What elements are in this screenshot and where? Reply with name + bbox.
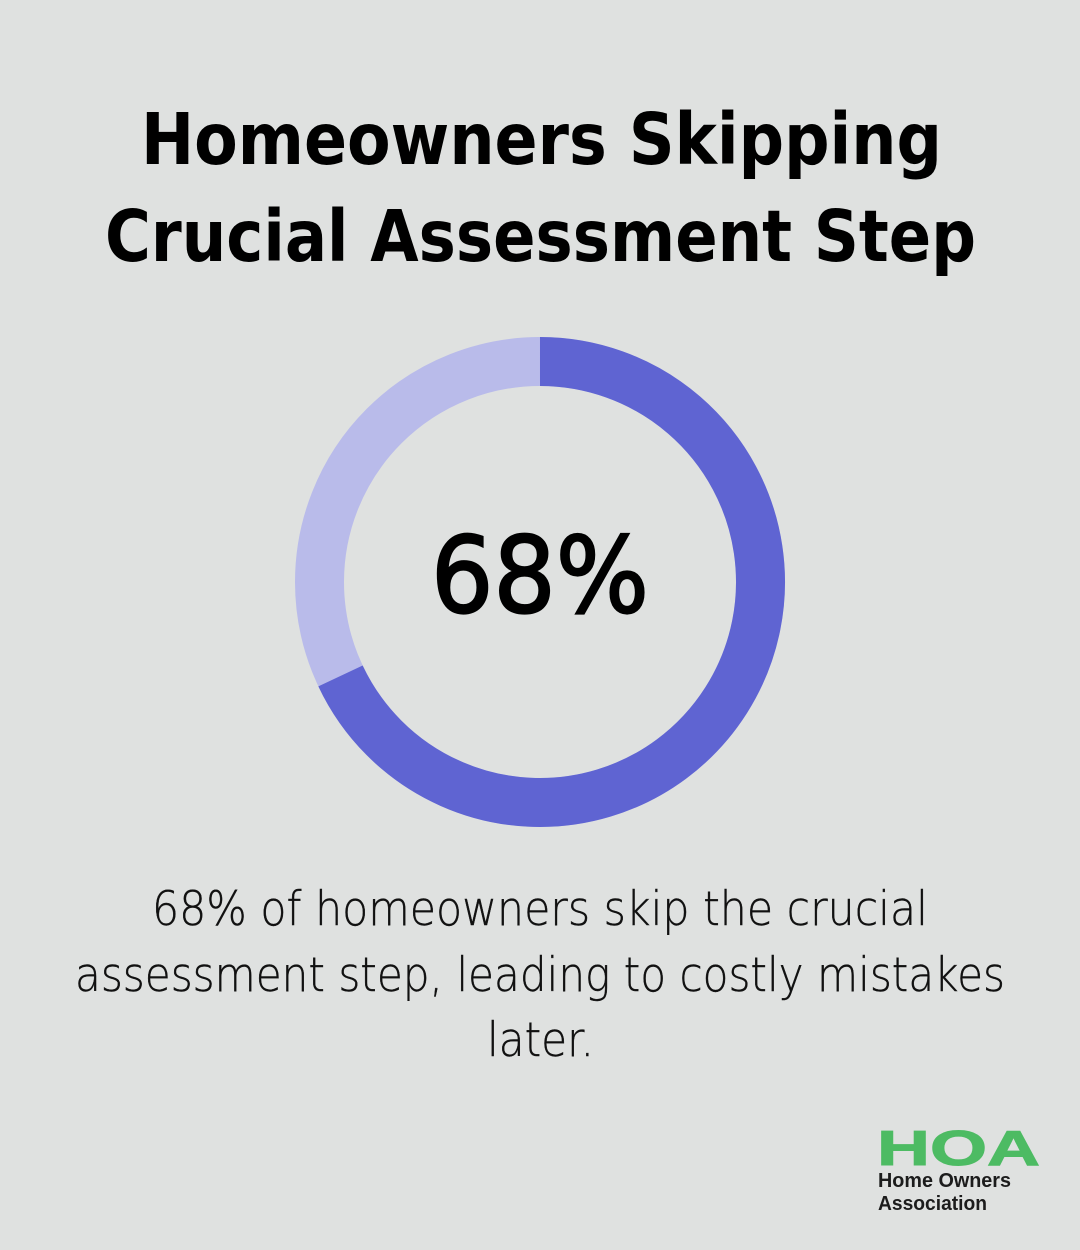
title: Homeowners Skipping [141, 98, 942, 181]
logo name: Association [878, 1193, 987, 1215]
logo mark: HOA: HOA [877, 1122, 1040, 1176]
description text: 68% of homeowners skip the crucial [152, 882, 928, 937]
title [105, 98, 976, 278]
description text: later. [487, 1013, 594, 1068]
logo name [878, 1170, 1011, 1215]
donut center value: 68% [431, 515, 649, 637]
logo name: Home Owners [878, 1170, 1011, 1192]
description text [75, 882, 1005, 1068]
donut chart: 68% [320, 362, 761, 802]
title: Crucial Assessment Step [105, 195, 976, 278]
logo: Home Owners Association [877, 1122, 1040, 1215]
